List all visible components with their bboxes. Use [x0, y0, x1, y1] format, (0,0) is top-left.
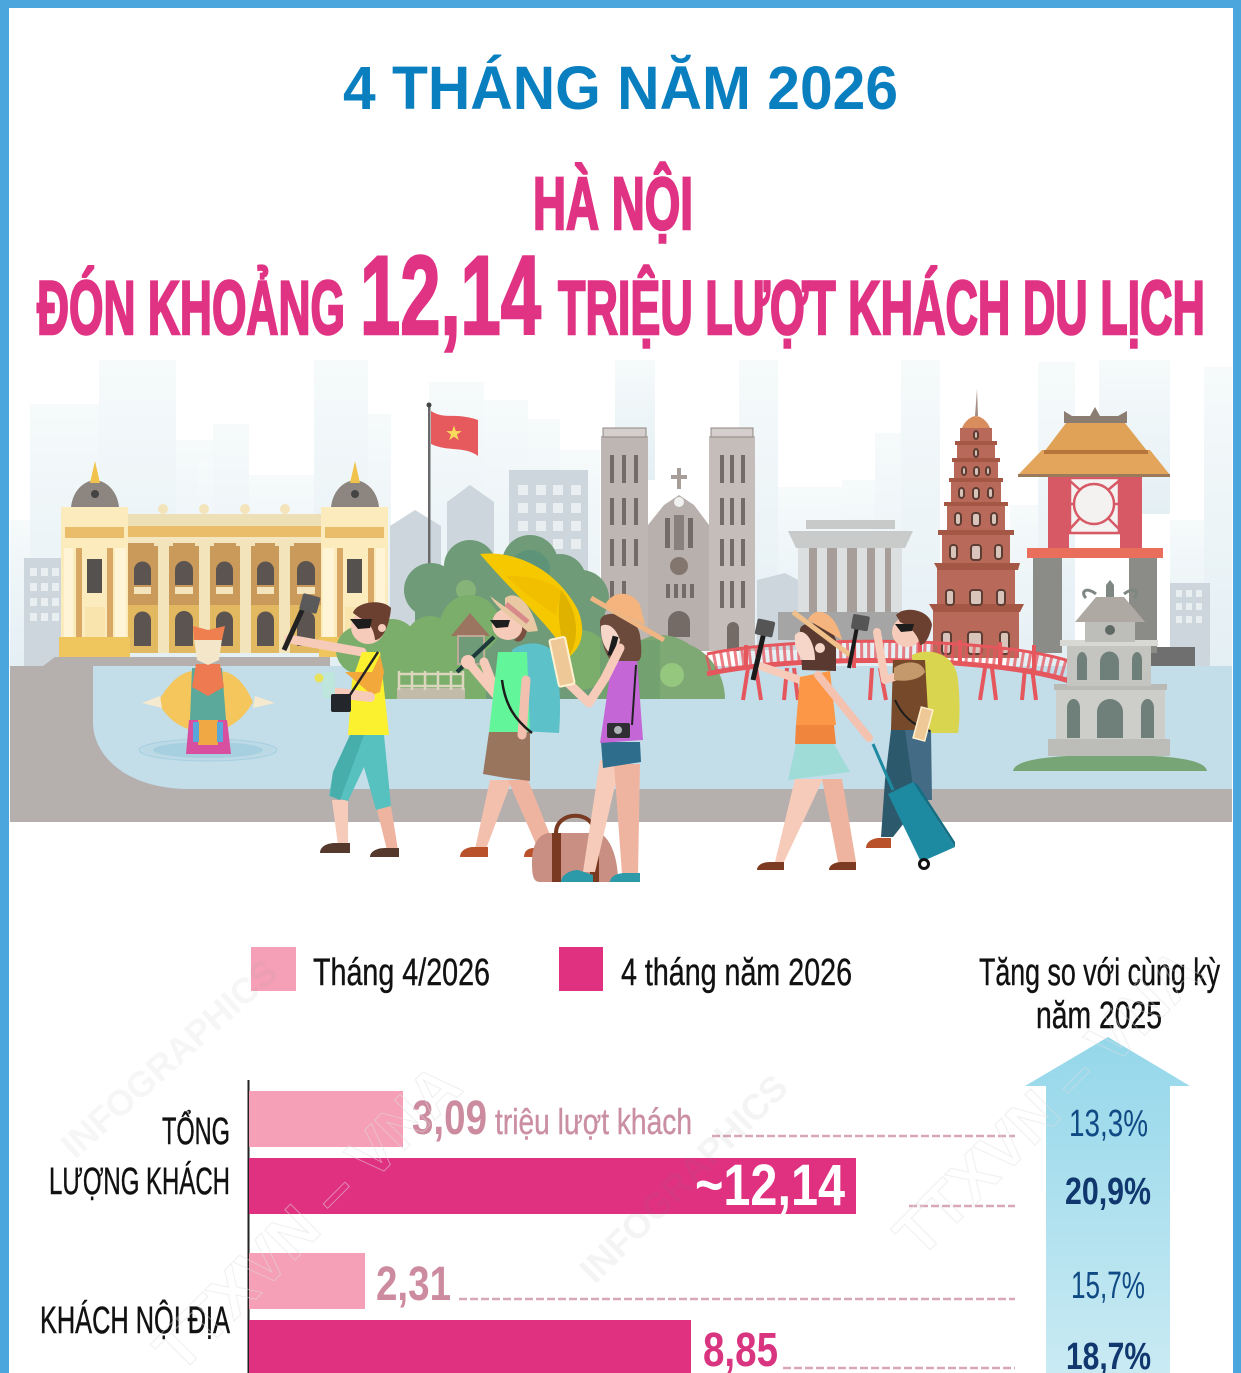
cathedral	[601, 428, 755, 651]
icon: flag: ★	[445, 423, 463, 445]
mid buildings	[24, 470, 1210, 666]
increase arrow	[1025, 1037, 1190, 1373]
tourist 5: brown vest and suitcase	[849, 610, 960, 868]
axis	[248, 1080, 250, 1373]
growth percentages	[1065, 1103, 1151, 1373]
value labels: 3,09	[412, 1092, 487, 1145]
red bridge	[707, 640, 1069, 700]
ground and lake	[10, 657, 1232, 822]
bars: total visitors	[249, 1091, 856, 1214]
icon: flag	[426, 402, 478, 570]
illustration: Hanoi landmarks and tourists	[10, 360, 1232, 882]
umbrella	[480, 553, 582, 657]
comparison column heading: năm 2025	[1036, 995, 1162, 1037]
trees	[336, 535, 725, 699]
row labels	[40, 1108, 230, 1342]
pavilion and railing	[397, 613, 490, 699]
watermarks: INFOGRAPHICS	[53, 951, 285, 1166]
dashed leaders	[459, 1136, 1015, 1368]
gate with red columns	[1018, 407, 1170, 653]
bag	[532, 816, 618, 882]
value labels	[376, 1092, 845, 1373]
legend: April 2026: Tháng 4/2026	[313, 952, 490, 994]
tourist 1: yellow shirt	[284, 593, 399, 857]
opera house	[59, 461, 390, 657]
value labels: triệu lượt khách	[495, 1101, 692, 1142]
pagoda	[929, 389, 1024, 658]
growth percentages: 15,7%	[1071, 1265, 1145, 1307]
tourist 4: orange top	[753, 612, 869, 870]
headline: HÀ NỘI	[533, 162, 693, 245]
tourist 3: purple top	[549, 594, 664, 882]
comparison column heading	[979, 952, 1220, 1037]
value labels: ~12,14	[695, 1153, 845, 1218]
row labels: TỔNG	[162, 1108, 230, 1153]
legend: 4 months 2026	[559, 947, 852, 994]
legend	[251, 947, 852, 994]
title: period: 4 THÁNG NĂM 2026	[343, 54, 898, 122]
row labels: KHÁCH NỘI ĐỊA	[40, 1298, 230, 1342]
watermarks	[53, 936, 1215, 1373]
legend: 4 months 2026: 4 tháng năm 2026	[621, 952, 852, 994]
tourist 2: green shirt	[457, 595, 560, 857]
bar chart	[40, 1080, 1151, 1373]
lake tower	[1013, 580, 1207, 771]
bars: domestic visitors	[249, 1253, 691, 1373]
mausoleum	[778, 520, 913, 640]
value labels: 2,31	[376, 1258, 451, 1311]
dark wall	[1150, 647, 1195, 666]
row labels: LƯỢNG KHÁCH	[49, 1160, 230, 1203]
headline: 12,14	[360, 233, 541, 358]
headline: ĐÓN KHOẢNG	[37, 266, 345, 351]
skyline background	[10, 360, 1232, 666]
puppet	[139, 626, 277, 761]
growth percentages: 13,3%	[1069, 1103, 1148, 1145]
headline	[37, 162, 1205, 358]
legend: April 2026	[251, 947, 490, 994]
watermarks: TTXVN – VNA	[881, 936, 1215, 1270]
watermarks: INFOGRAPHICS	[572, 1066, 796, 1291]
growth percentages: 20,9%	[1065, 1171, 1151, 1213]
